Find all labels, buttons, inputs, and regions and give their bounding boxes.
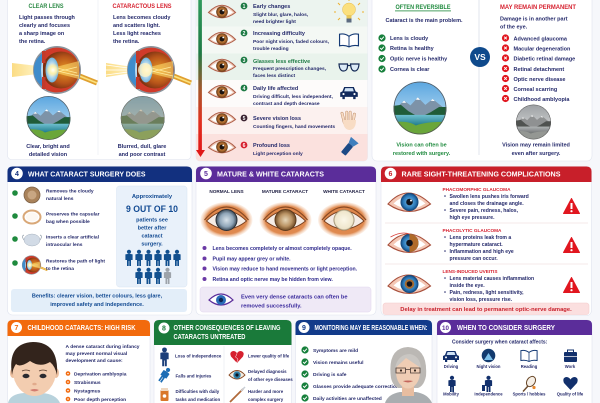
checklist: Glasses provide adequate correction: [313, 384, 399, 390]
labels: [209, 189, 365, 194]
lens-induced uveitis text: LENS-INDUCED UVEITIS: [442, 269, 497, 274]
bullet list: [202, 246, 358, 283]
labels: WHITE CATARACT: [323, 189, 365, 194]
icon: glasses: [339, 64, 359, 71]
header: CATARACTS UNTREATED: [174, 332, 246, 341]
phacolytic glaucoma text: hypermature cataract.: [450, 242, 503, 248]
diagram: cataract eye: [106, 46, 191, 94]
badge: VS: [470, 47, 490, 67]
caption: clear vision: Clear, bright and: [26, 144, 70, 150]
stage 6: Profound loss: [253, 143, 290, 149]
stat box: 9 out of 10: cataract: [141, 234, 163, 240]
bullet list: Vision may reduce to hand movements or light perception.: [212, 266, 358, 272]
heading: clear lens: CLEAR LENS: [28, 3, 64, 10]
header: 4: [15, 171, 19, 178]
panel 4: what cataract surgery does: [8, 166, 192, 315]
step 4: Restores the path of light: [46, 258, 105, 264]
eye: mature cataract: [260, 202, 312, 238]
stage 1: need brighter light: [253, 19, 296, 25]
heading: cataractous lens: CATARACTOUS LENS: [112, 3, 172, 10]
night vision: [477, 349, 501, 369]
stage 1: 1: [243, 4, 246, 10]
eye: phacomorphic: [388, 193, 430, 212]
caption: restored: Vision can often be: [396, 142, 447, 148]
image: limited vision scene: [516, 104, 551, 140]
caption: limited: even after surgery.: [512, 151, 561, 157]
quality of life: [557, 377, 584, 396]
checklist: permanent: Childhood amblyopia: [514, 97, 570, 103]
checklist: reversible: Retina is healthy: [390, 46, 435, 52]
heading: often reversible: OFTEN REVERSIBLE: [396, 4, 450, 11]
night vision: Night vision: [477, 364, 501, 369]
icon: book: [340, 34, 358, 47]
checklist: Symptoms are mild: [313, 348, 358, 354]
harder surgery: Harder and more: [248, 389, 284, 394]
panel 7: childhood cataracts: [8, 320, 150, 403]
step 4: [12, 255, 105, 275]
checklist: permanent: Retinal detachment: [514, 67, 564, 73]
panel 6: rare complications: [381, 166, 592, 316]
bullet list: Deprivation amblyopia: [74, 372, 127, 378]
checklist: reversible: Lens is cloudy: [390, 36, 429, 42]
step 1: natural lens: [46, 196, 74, 202]
lower quality of life: Lower quality of life: [248, 354, 290, 358]
header: MONITORING MAY BE REASONABLE WHEN:: [314, 323, 428, 332]
phacolytic glaucoma text: Lens proteins leak from a: [450, 235, 511, 241]
reading: Reading: [521, 364, 538, 369]
stage 2: 2: [243, 31, 246, 37]
text: intro: development and cause:: [66, 358, 123, 364]
header: [437, 320, 592, 335]
header: [8, 320, 150, 336]
work: [564, 350, 577, 369]
lens-induced uveitis text: [442, 269, 534, 303]
difficulties: [160, 388, 220, 402]
stage 2: Increasing difficulty: [253, 31, 306, 37]
bullet list: Retina and optic nerve may be hidden from view.: [212, 277, 333, 283]
pictogram: people: [125, 250, 181, 284]
panel 9: monitoring: [296, 320, 432, 403]
stage 2: trouble reading: [253, 46, 289, 52]
labels: MATURE CATARACT: [262, 189, 308, 194]
stat box: 9 out of 10: surgery.: [141, 242, 163, 248]
bullet list: Pupil may appear grey or white.: [212, 256, 291, 262]
panel: reversible vs permanent: [372, 0, 592, 161]
checklist: Daily activities are unaffected: [313, 396, 382, 402]
stage 3: faces less distinct: [253, 73, 296, 79]
header: 9: [302, 325, 306, 332]
text: clear lens description: the retina.: [19, 39, 46, 45]
header: CHILDHOOD CATARACTS: HIGH RISK: [28, 323, 136, 332]
checklist: Driving is safe: [313, 372, 347, 378]
stat box: 9 out of 10: better after: [138, 226, 167, 232]
checklist: permanent: [502, 34, 575, 103]
header: 7: [15, 325, 19, 332]
text: cataractous lens description: the retina.: [113, 39, 140, 45]
step 3: [12, 234, 100, 248]
stage 4: [208, 85, 334, 107]
checklist: reversible: Cornea is clear: [390, 67, 430, 73]
callout: benefits: improved safety and independence.: [50, 302, 144, 308]
caption: restored: restored with surgery.: [393, 151, 451, 157]
step 2: bag when possible: [46, 219, 90, 225]
callout: dense cataracts: Even very dense cataracts can often be: [241, 294, 348, 300]
phacomorphic glaucoma text: [442, 187, 529, 221]
lens-induced uveitis text: inside the eye.: [450, 283, 485, 289]
independence: Independence: [474, 392, 503, 396]
stage 6: [208, 140, 303, 157]
harder surgery: [230, 387, 284, 402]
bullet list: Poor depth perception: [74, 397, 126, 403]
independence: [474, 376, 503, 396]
reading: [521, 350, 538, 369]
mobility: [443, 376, 460, 396]
delayed diagnosis: Delayed diagnosis: [248, 369, 287, 374]
stage 2: [208, 30, 330, 52]
step 1: [12, 187, 94, 203]
text: intro: A dense cataract during infancy: [66, 344, 140, 350]
mobility: Mobility: [443, 392, 460, 396]
stage 1: Early changes: [253, 4, 290, 10]
icon: warning: [564, 278, 580, 292]
panel 10: when to consider surgery: [437, 320, 592, 403]
phacolytic glaucoma text: PHACOLYTIC GLAUCOMA: [442, 228, 502, 233]
eye: uveitis: [388, 275, 430, 294]
callout: dense cataracts: removed successfully.: [241, 304, 302, 310]
step 2: Preserves the capsular: [46, 212, 100, 218]
delayed diagnosis: [229, 369, 293, 382]
stage 5: [208, 112, 335, 130]
icon: warning: [564, 198, 580, 214]
stage 6: Light perception only: [253, 151, 303, 157]
stage 3: Glasses less effective: [253, 59, 310, 65]
step 2: [12, 210, 100, 225]
text: main problem: Cataract is the main problem.: [385, 18, 463, 24]
diagram: clear lens eye: [12, 46, 97, 94]
bullet list: Nystagmus: [74, 388, 101, 394]
header: [196, 166, 376, 182]
sports: Sports / hobbies: [513, 392, 546, 396]
stage 4: contrast and depth decrease: [253, 101, 320, 107]
step 3: intraocular lens: [46, 242, 83, 248]
text: clear lens description: a sharp image on: [19, 31, 65, 37]
arrow: progression: [196, 0, 205, 157]
phacolytic glaucoma text: [442, 228, 514, 262]
text: damage: Damage is in another part: [500, 16, 568, 22]
stage 5: Severe vision loss: [253, 116, 301, 122]
bullet list: Lens becomes completely or almost completely opaque.: [212, 246, 352, 252]
step 4: to the retina: [46, 266, 74, 272]
stage 3: Frequent prescription changes,: [253, 66, 327, 72]
caption: clear vision: detailed vision: [29, 152, 68, 158]
callout: benefits: Benefits: clearer vision, better colours, less glare,: [32, 294, 163, 300]
panel 8: consequences: [154, 320, 293, 403]
stage 6: 6: [243, 143, 246, 149]
harder surgery: complex surgery: [248, 397, 284, 402]
panel: clear vs cataractous lens: [8, 0, 191, 160]
text: intro: may prevent normal visual: [66, 351, 128, 357]
text: cataractous lens description: Less light reaches: [113, 31, 161, 37]
icon: hand: [341, 111, 356, 130]
header: 6: [389, 171, 393, 178]
checklist: permanent: Optic nerve disease: [514, 77, 565, 83]
lens-induced uveitis text: Pain, redness, light sensitivity,: [450, 290, 524, 296]
stage 3: [208, 57, 327, 79]
badge: VS: VS: [474, 52, 486, 62]
checklist: permanent: Advanced glaucoma: [514, 36, 568, 42]
panel 5: mature and white cataracts: [196, 166, 376, 315]
step 3: Inserts a clear artificial: [46, 234, 100, 240]
stage 4: Driving difficult, less independent,: [253, 94, 334, 100]
stat box: 9 out of 10: Approximately: [132, 194, 173, 200]
icon: warning: [564, 238, 580, 252]
step 1: Removes the cloudy: [46, 188, 94, 194]
phacomorphic glaucoma text: PHACOMORPHIC GLAUCOMA: [442, 187, 511, 192]
eye: white cataract: [318, 202, 370, 238]
text: clear lens description: clearly and focuses: [19, 23, 70, 29]
phacomorphic glaucoma text: and closes the drainage angle.: [450, 201, 524, 207]
work: Work: [565, 364, 576, 369]
header: 5: [204, 171, 208, 178]
text: damage: of the eye.: [500, 24, 528, 30]
header: 10: [442, 325, 449, 332]
icon: flashlight: [339, 137, 359, 157]
phacolytic glaucoma text: Inflammation and high eye: [450, 249, 514, 255]
loss of independence: Loss of independence: [175, 354, 222, 358]
header: WHEN TO CONSIDER SURGERY: [457, 323, 555, 332]
stage 5: 5: [243, 116, 246, 122]
stage 1: [208, 3, 309, 25]
caption: blurred vision: Blurred, dull, glare: [118, 144, 166, 150]
header: OTHER CONSEQUENCES OF LEAVING: [174, 323, 281, 332]
lens-induced uveitis text: Lens material causes inflammation: [450, 276, 534, 282]
text: cataractous lens description: Lens becomes cloudy: [113, 15, 171, 21]
text: clear lens description: Light passes through: [19, 15, 76, 21]
checklist: Vision remains useful: [313, 360, 364, 366]
checklist: [301, 346, 399, 402]
caption: blurred vision: and poor contrast: [119, 152, 166, 158]
falls and injuries: Falls and injuries: [176, 374, 212, 378]
callout: benefits: [11, 289, 187, 312]
phacolytic glaucoma text: pressure can occur.: [450, 256, 498, 262]
callout: delay in treatment: [383, 303, 589, 314]
driving: [443, 351, 459, 369]
header: RARE SIGHT-THREATENING COMPLICATIONS: [402, 170, 561, 178]
stage 4: 4: [243, 86, 246, 92]
stage 3: 3: [243, 58, 246, 64]
lens-induced uveitis text: vision loss, pressure rise.: [450, 297, 513, 303]
stage 4: Daily life affected: [253, 86, 298, 92]
image: clear scene: [26, 96, 70, 140]
checklist: reversible: Optic nerve is healthy: [390, 56, 448, 62]
header: [296, 320, 432, 335]
eye: phacolytic: [388, 233, 430, 252]
header: 8: [162, 326, 166, 332]
text: consider: Consider surgery when cataract affects:: [452, 340, 548, 346]
caption: limited: Vision may remain limited: [502, 142, 570, 148]
header: [8, 166, 192, 182]
image: blurred scene: [121, 96, 165, 140]
bullet list: Strabismus: [74, 380, 101, 386]
header: MATURE & WHITE CATARACTS: [217, 170, 324, 178]
phacomorphic glaucoma text: high eye pressure.: [450, 215, 495, 221]
heading: may remain permanent: MAY REMAIN PERMANENT: [500, 4, 576, 11]
image: restored scene: [394, 82, 446, 134]
image: child: [8, 342, 60, 403]
callout: dense cataracts: [200, 287, 371, 312]
labels: NORMAL LENS: [209, 189, 244, 194]
difficulties: Difficulties with daily: [176, 389, 220, 394]
icon: light bulb: [334, 0, 364, 22]
stage 2: Poor night vision, faded colours,: [253, 39, 330, 45]
checklist: permanent: Macular degeneration: [514, 46, 571, 52]
stat box: 9 out of 10: [116, 186, 187, 287]
header: [381, 166, 592, 182]
panel: stages of vision loss: [196, 0, 368, 161]
stat box: 9 out of 10: 9 OUT OF 10: [126, 204, 178, 214]
checklist: permanent: Corneal scarring: [514, 87, 557, 93]
text: cataractous lens description: and scatters light.: [113, 23, 161, 29]
checklist: permanent: Diabetic retinal damage: [514, 56, 575, 62]
difficulties: tasks and medication: [176, 397, 220, 402]
callout: delay in treatment: Delay in treatment can lead to permanent optic-nerve damage.: [400, 307, 572, 313]
sports: [513, 375, 546, 396]
eye: normal lens: [200, 202, 252, 238]
header: [154, 320, 292, 345]
stage 5: Counting fingers, hand movements: [253, 124, 335, 130]
stat box: 9 out of 10: patients see: [136, 218, 168, 224]
icon: car: [340, 87, 358, 99]
stage 1: Slight blur, glare, halos,: [253, 12, 309, 18]
header: WHAT CATARACT SURGERY DOES: [28, 170, 146, 178]
phacomorphic glaucoma text: Severe pain, redness, halos,: [450, 208, 519, 214]
checklist: reversible: [378, 34, 448, 73]
delayed diagnosis: of other eye diseases: [248, 377, 293, 382]
driving: Driving: [444, 364, 459, 369]
quality of life: Quality of life: [557, 392, 584, 396]
phacomorphic glaucoma text: Swollen lens pushes iris forward: [450, 194, 529, 200]
image: older woman: [385, 347, 432, 403]
bullet list: [66, 371, 127, 403]
